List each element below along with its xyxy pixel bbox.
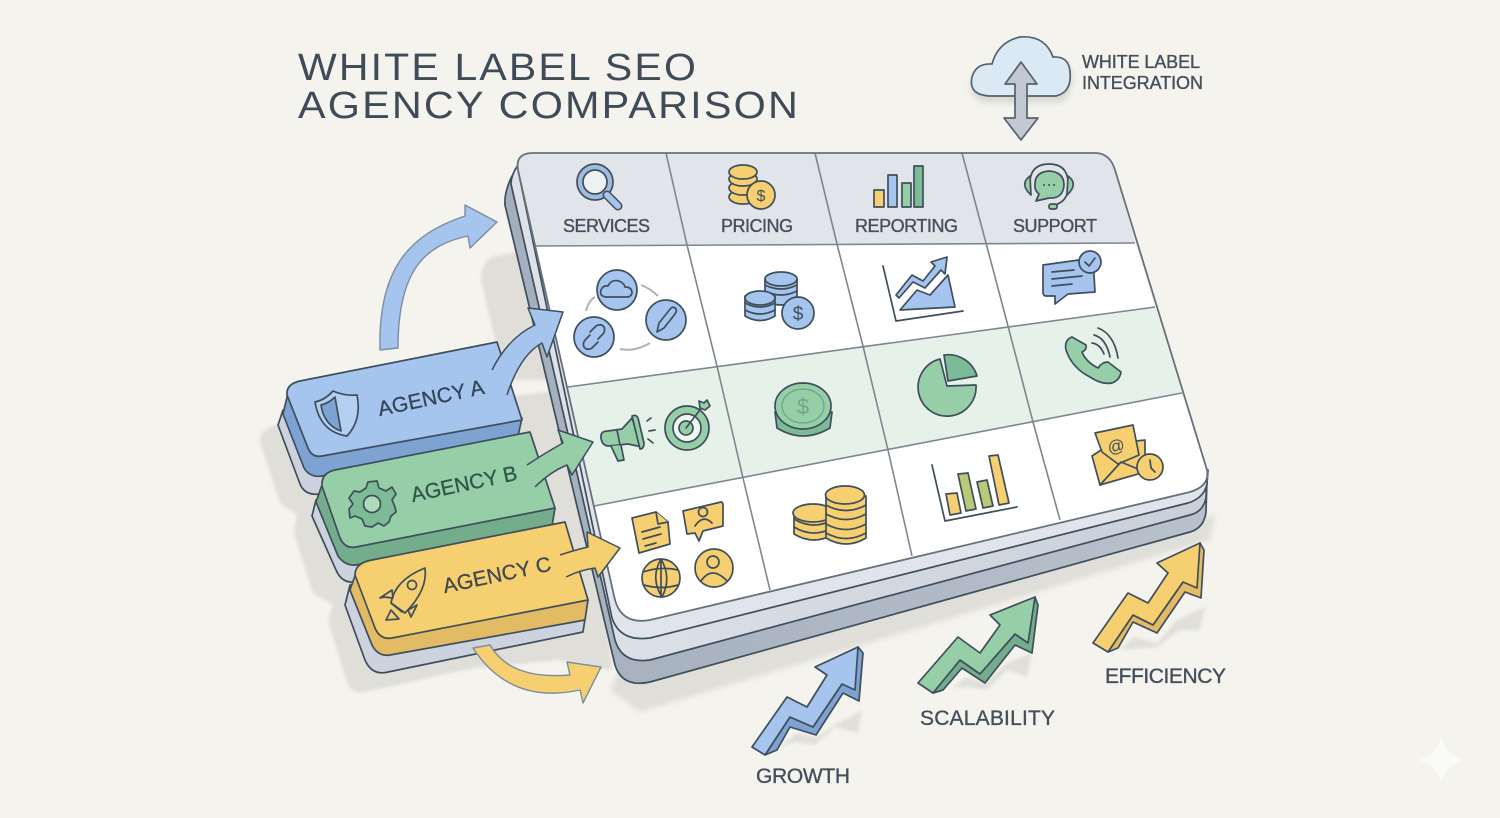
agency c side [350,570,588,655]
cell: pricing agency b: $ [797,394,809,419]
agency a plate [278,410,430,494]
agency a side [283,393,522,476]
icon: shield [315,391,358,436]
row: yellow [594,393,1207,621]
shadows [260,250,1215,712]
label: white label integration: INTEGRATION [1082,73,1203,93]
cell: pricing agency b [775,383,832,436]
arrow: blue to services [492,308,563,395]
cell: pricing agency a [745,272,814,329]
cell: services agency a [574,270,686,357]
label: efficiency: EFFICIENCY [1105,665,1226,688]
agency b face [322,432,555,547]
column header: pricing [721,165,793,236]
row: green [568,307,1182,506]
title: AGENCY COMPARISON [298,85,800,127]
board middle plate [511,165,1207,661]
arrow: yellow to services [560,532,620,577]
cell: services agency c [632,502,733,597]
agency a button [278,342,522,494]
column header: support [1013,164,1097,236]
agency b plate [312,500,470,582]
icon: rocket [380,568,425,620]
title [298,47,800,127]
sparkle watermark [1418,736,1464,783]
grid lines [536,153,1182,590]
arrow: efficiency [1093,543,1205,652]
agency c face [355,522,588,638]
column header: support: SUPPORT [1013,216,1097,236]
agency c button [345,522,588,673]
agency b button: AGENCY B [409,462,519,507]
arrow: blue curved to header [380,205,497,350]
cell: support agency c [1092,425,1163,485]
arrow: growth [752,647,863,755]
icon: cloud integration [971,37,1073,140]
label: scalability: SCALABILITY [920,707,1055,730]
cell: reporting agency a [883,257,963,321]
board outline [518,153,1207,621]
cell: pricing agency a: $ [793,304,804,325]
label: white label integration: WHITE LABEL [1082,52,1200,72]
board lower plate [505,176,1207,683]
column header: reporting [855,166,958,236]
cell: pricing agency c [793,486,866,544]
column header: services: SERVICES [563,216,650,236]
agency c plate [345,585,586,673]
arrow: green to services [527,430,593,487]
growth arrows [752,543,1226,788]
board upper plate [518,170,1208,639]
column header: reporting: REPORTING [855,216,958,236]
row: blue [536,243,1155,387]
cell: support agency c: @ [1105,435,1127,458]
arrow: yellow bottom curved [473,645,601,703]
icon: gear [349,481,396,527]
column header: pricing: $ [757,188,766,205]
cell: services agency b [601,400,710,461]
cell: support agency b [1066,328,1121,383]
agency b side [316,482,555,565]
arrow: scalability [918,597,1038,693]
label: white label integration [1082,52,1203,93]
cell: reporting agency c [932,455,1017,521]
agency b button [312,432,555,582]
cell: reporting agency b [918,355,977,416]
header row [518,153,1135,246]
comparison table board [505,153,1208,683]
agency a button: AGENCY A [376,376,486,421]
column header: services [563,164,650,236]
title: WHITE LABEL SEO [298,47,698,89]
cell: support agency a [1043,251,1101,304]
label: growth: GROWTH [756,765,850,788]
agency c button: AGENCY C [441,553,553,598]
column header: pricing: PRICING [721,216,793,236]
agency a face [287,342,522,456]
